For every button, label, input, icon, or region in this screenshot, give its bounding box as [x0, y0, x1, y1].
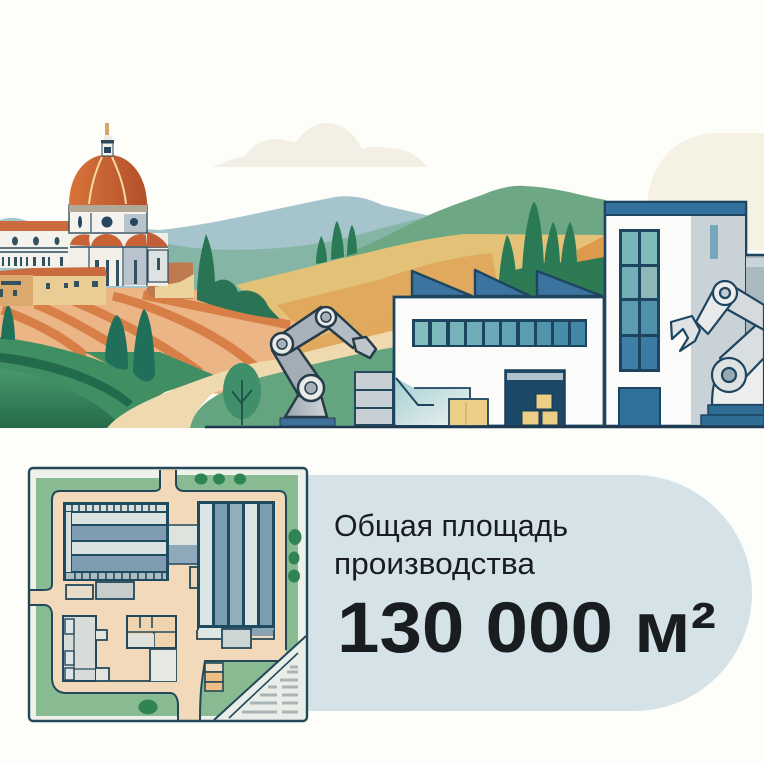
office tower [605, 202, 764, 426]
green foreground hills [85, 352, 214, 392]
road [107, 330, 395, 428]
robot arm right [671, 281, 764, 426]
tower window [619, 229, 660, 372]
cypress group far [316, 221, 357, 264]
factory [394, 270, 604, 426]
crate big [449, 399, 488, 426]
stat label: Общая площадь [334, 508, 568, 543]
field stripes [2, 295, 290, 372]
left nave [0, 221, 70, 232]
distant blue hills [0, 196, 440, 300]
parking lot [214, 636, 306, 720]
drums [355, 372, 393, 425]
green hill [345, 186, 606, 300]
cypress mid 2 [133, 309, 155, 382]
plan frame [29, 468, 307, 721]
dome [69, 155, 147, 205]
stat value: 130 000 м² [337, 589, 716, 668]
tree [223, 363, 261, 425]
tower door [619, 388, 660, 426]
main hall [394, 297, 604, 426]
right wing [746, 255, 764, 350]
sun shape [648, 133, 764, 250]
small house [155, 274, 194, 298]
stat panel [300, 475, 752, 711]
parking blocks [205, 663, 223, 691]
lantern [102, 143, 113, 156]
green areas [36, 478, 159, 590]
apse lower [70, 233, 168, 286]
sawtooth roof [412, 270, 602, 296]
terracotta ground [0, 288, 295, 395]
road outlines [29, 470, 286, 721]
site plan [29, 468, 307, 721]
sand ground [29, 468, 286, 721]
stat panel: производства [334, 546, 536, 581]
front houses [0, 267, 107, 276]
yellow field [236, 234, 606, 345]
loading dock [396, 378, 470, 425]
drum [69, 205, 147, 233]
strip window [412, 319, 587, 347]
landscape [0, 123, 764, 428]
cloud [212, 123, 427, 167]
building A [63, 502, 169, 581]
right meadow [190, 347, 395, 428]
building B [197, 501, 275, 648]
building C [63, 616, 109, 681]
orange-yellow band [277, 253, 500, 330]
door with boxes [505, 370, 565, 426]
cypress mid 1 [105, 315, 128, 370]
trees [138, 474, 302, 714]
teal meadow [165, 216, 430, 300]
robot arm left [271, 307, 376, 426]
ground line [205, 426, 764, 428]
cathedral [0, 123, 168, 306]
green right of hill [499, 257, 604, 298]
tree clump [197, 234, 279, 319]
cypress group right [499, 202, 577, 282]
half domes [70, 234, 90, 246]
orange patch [577, 236, 604, 263]
cypress left [1, 304, 15, 340]
field lower light band [300, 318, 395, 370]
building rust slope [146, 262, 193, 299]
building D [109, 616, 176, 681]
connector [66, 525, 198, 599]
